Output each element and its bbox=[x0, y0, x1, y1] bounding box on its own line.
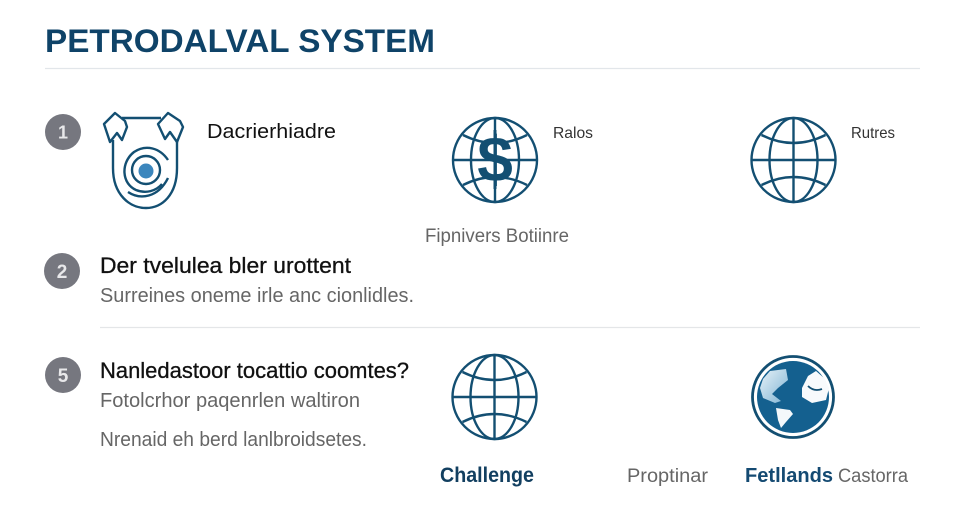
icon: globe lower bbox=[452, 355, 536, 439]
step 2 number badge: 2 bbox=[57, 262, 67, 283]
step 2 heading: Der tvelulea bler urottent bbox=[100, 253, 351, 278]
label: Challenge: Challenge bbox=[440, 464, 534, 487]
step 5 number badge bbox=[45, 357, 81, 393]
step 1 label: Dacrierhiadre bbox=[207, 121, 336, 143]
icon: globe bbox=[752, 118, 836, 202]
step 5 heading: Nanledastoor tocattio coomtes? bbox=[100, 358, 409, 383]
caption under dollar globe: Fipnivers Botiinre bbox=[425, 226, 569, 247]
step 5 description line 1: Fotolcrhor paqenrlen waltiron bbox=[100, 390, 360, 412]
label: Proptinar: Proptinar bbox=[627, 466, 709, 487]
label: Fetllands Castorra: Castorra bbox=[838, 466, 908, 487]
step 2 number badge bbox=[44, 253, 80, 289]
label: Ralos: Ralos bbox=[553, 125, 593, 142]
icon: filled earth bbox=[752, 356, 834, 438]
icon: shield with spiral bbox=[104, 113, 183, 208]
step 5 description line 2: Nrenaid eh berd lanlbroidsetes. bbox=[100, 429, 367, 451]
label: Rutres: Rutres bbox=[851, 125, 895, 142]
icon: globe with dollar sign: $ bbox=[477, 123, 513, 195]
step 2 description: Surreines oneme irle anc cionlidles. bbox=[100, 285, 414, 307]
step 1 number badge bbox=[45, 114, 81, 150]
step 1 number badge: 1 bbox=[58, 122, 68, 142]
label: Fetllands Castorra: Fetllands bbox=[745, 465, 833, 487]
title: PETRODALVAL SYSTEM bbox=[45, 23, 435, 59]
label: Fetllands Castorra bbox=[745, 465, 908, 487]
icon: globe with dollar sign bbox=[453, 118, 537, 202]
step 5 number badge: 5 bbox=[58, 366, 69, 387]
